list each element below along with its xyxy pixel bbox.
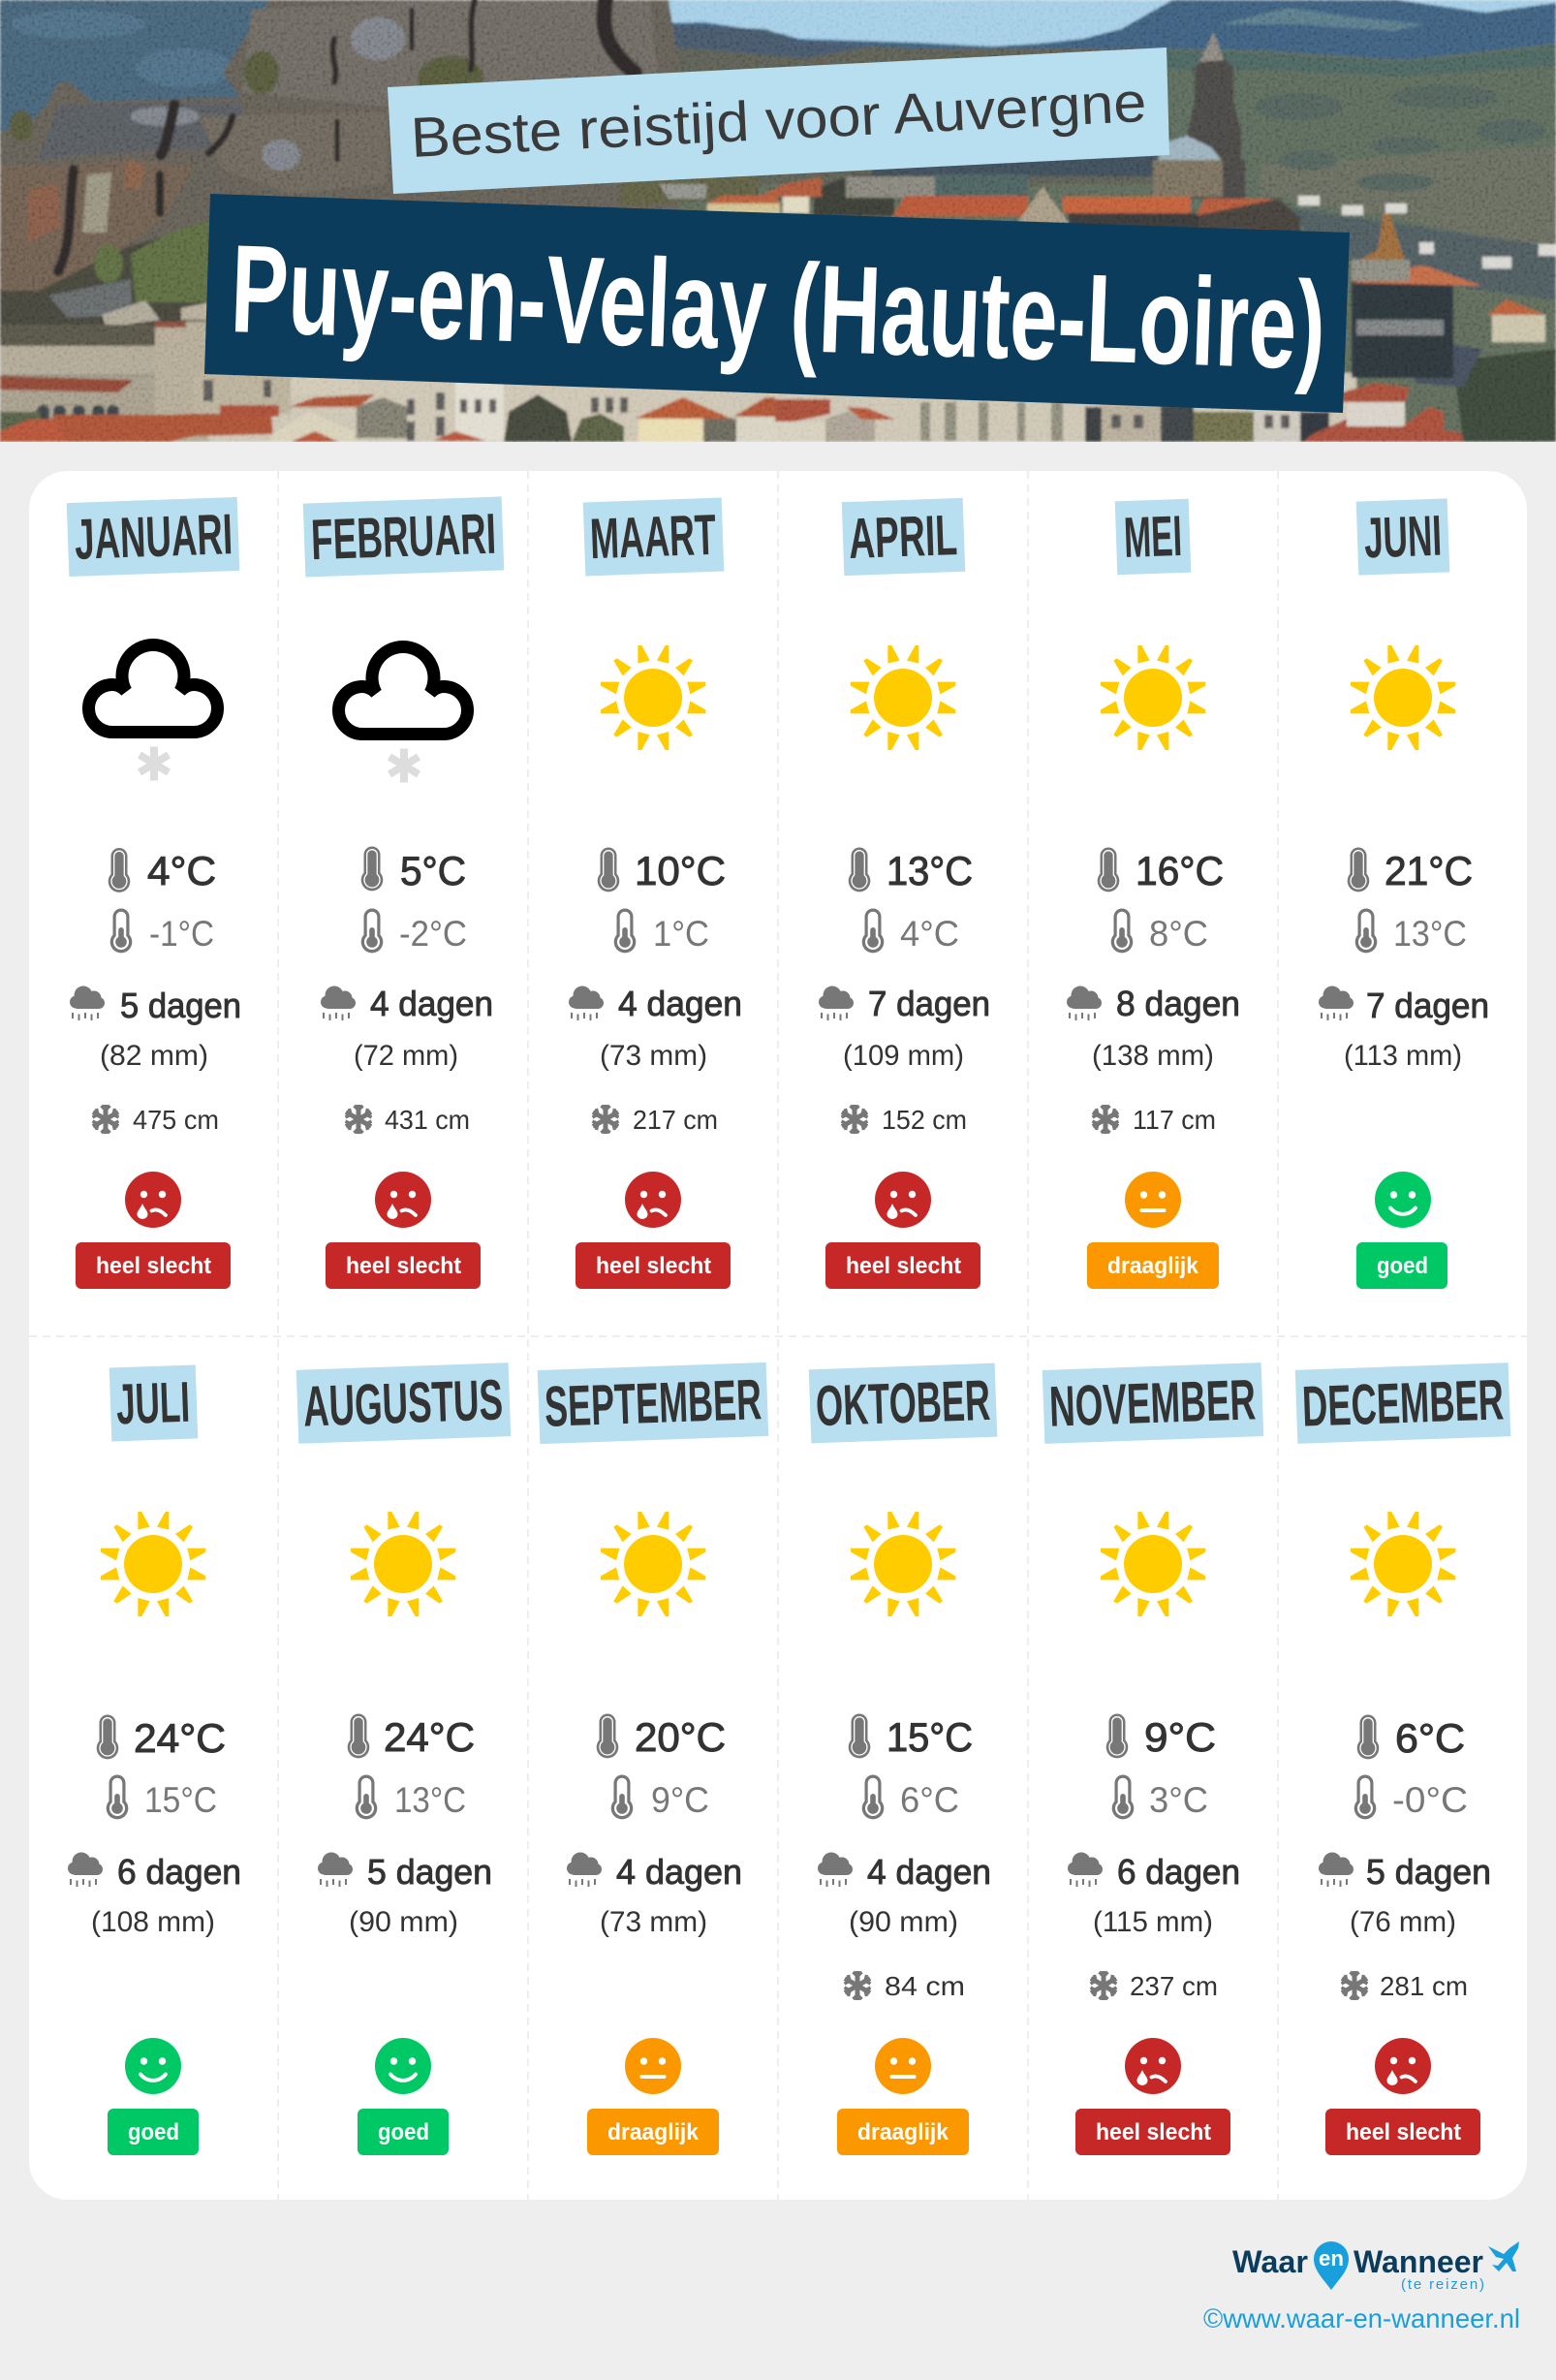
month label [538,1362,768,1444]
rating face [625,2038,681,2094]
rainfall: (90 mm) [849,1906,958,1938]
weather icon: sun [1351,1512,1455,1616]
rating badge [1087,1242,1219,1289]
snowfall: 152 cm [882,1105,967,1135]
rating badge [837,2109,969,2155]
month label: FEBRUARI [310,502,497,572]
rating badge [108,2109,199,2155]
month: december [1295,1362,1510,2155]
low temperature [614,909,709,954]
high temperature [361,847,466,893]
month label: APRIL [848,503,958,571]
month: februari [303,496,504,1289]
high temperature [597,1713,726,1760]
month label: SEPTEMBER [544,1367,762,1439]
rain days: 4 dagen [867,1852,991,1892]
rain days: 8 dagen [1116,984,1240,1023]
month: juli [68,1364,241,2155]
rating face [375,1172,431,1228]
rating badge [1356,1242,1447,1289]
snowfall: 117 cm [1133,1105,1216,1135]
month label: OKTOBER [815,1368,991,1438]
low temperature: 4°C [900,914,959,954]
rating badge: goed [378,2119,429,2145]
rain days: 5 dagen [120,986,241,1025]
month: april [819,498,990,1289]
high temperature: 20°C [635,1714,726,1760]
high temperature: 15°C [887,1714,973,1760]
rating badge [1325,2109,1480,2155]
high temperature [109,848,216,893]
rain days: 7 dagen [1366,986,1489,1025]
low temperature [862,909,959,954]
weather icon: sun [851,1512,955,1616]
weather icon: sun [351,1512,455,1616]
snowfall: 281 cm [1380,1971,1468,2001]
rainfall: (108 mm) [91,1906,215,1938]
rating badge: heel slecht [96,1253,211,1279]
snowfall [593,1105,718,1135]
rain days [70,986,241,1025]
rainfall: (76 mm) [1350,1906,1456,1938]
logo: Waar en Wanneer [1232,2241,1519,2293]
high temperature [849,1713,973,1760]
rainfall: (115 mm) [1093,1906,1213,1938]
rating face [375,2038,431,2094]
snowfall [1093,1105,1216,1135]
rating badge: goed [1377,1253,1428,1279]
weather icon: cloud with snow [89,645,217,781]
logo: Waar en Wanneer: Wanneer [1354,2244,1483,2279]
low temperature: 13°C [394,1780,466,1820]
rain days: 5 dagen [1366,1852,1491,1892]
rating badge: heel slecht [1096,2119,1211,2145]
low temperature: 3°C [1149,1780,1208,1820]
month: maart [569,498,742,1289]
high temperature: 4°C [147,848,216,893]
low temperature: 15°C [144,1780,217,1820]
high temperature [1357,1715,1465,1761]
rating badge: heel slecht [1346,2119,1461,2145]
snowfall: 217 cm [633,1105,718,1135]
low temperature: -2°C [399,914,467,954]
low temperature [1355,909,1467,954]
low temperature: 13°C [1393,914,1467,954]
rating badge [1075,2109,1230,2155]
rain days: 6 dagen [1117,1852,1240,1892]
snowfall [1341,1971,1468,2001]
month: mei [1067,499,1240,1289]
high temperature: 24°C [134,1715,226,1761]
rainfall: (109 mm) [843,1040,964,1072]
month label: JULI [115,1370,191,1436]
month label [296,1362,511,1444]
month label [583,498,724,576]
high temperature: 13°C [887,848,973,893]
low temperature [361,909,467,954]
month label: JUNI [1363,504,1443,570]
rating badge: heel slecht [596,1253,711,1279]
month: juni [1319,498,1489,1289]
month: januari [67,497,241,1289]
weather icon: sun [601,1512,705,1616]
rating badge: heel slecht [346,1253,461,1279]
rainfall: (138 mm) [1092,1040,1214,1072]
weather icon: sun [851,645,955,750]
rainfall: (73 mm) [600,1040,707,1072]
header photo: Le Puy-en-Velay [0,0,1556,442]
rating face [875,2038,931,2094]
rating face [125,2038,181,2094]
low temperature [356,1775,466,1820]
weather icon: sun [1101,645,1205,750]
snowfall: 84 cm [885,1971,965,2001]
month label: MEI [1123,504,1183,570]
snowfall: 431 cm [385,1105,470,1135]
rainfall: (90 mm) [349,1906,458,1938]
low temperature [1112,1775,1208,1820]
icon: airplane [1488,2241,1519,2271]
rating face [1125,1172,1181,1228]
month label: MAART [589,503,717,571]
rating badge [825,1242,980,1289]
calendar card [29,471,1527,2200]
rating face [125,1172,181,1228]
rating face [625,1172,681,1228]
month: augustus [296,1362,511,2155]
low temperature: 9°C [651,1780,709,1820]
high temperature: 9°C [1144,1714,1216,1760]
rain days: 4 dagen [616,1852,742,1892]
high temperature [1106,1713,1216,1760]
high temperature: 6°C [1395,1715,1465,1761]
rating badge: draaglijk [1107,1253,1199,1279]
rating badge [587,2109,719,2155]
month label: JANUARI [74,502,233,572]
month: november [1043,1362,1263,2155]
rain days: 6 dagen [117,1852,241,1892]
rainfall: (72 mm) [354,1040,458,1072]
weather icon: sun [1101,1512,1205,1616]
month label [842,498,965,576]
rating badge: heel slecht [846,1253,961,1279]
icon: map pin: en [1319,2246,1344,2270]
website url: ©www.waar-en-wanneer.nl [1203,2303,1520,2333]
month label [809,1363,997,1443]
low temperature [110,909,214,954]
month label [303,496,504,578]
rating badge: draaglijk [607,2119,700,2145]
weather icon: sun [601,645,705,750]
rating face [1375,2038,1431,2094]
month label [67,497,239,577]
high temperature: 10°C [635,848,726,893]
weather icon: cloud with snow [339,647,467,783]
logo: Waar en Wanneer: (te reizen) [1401,2276,1484,2293]
rating face [875,1172,931,1228]
rainfall: (82 mm) [100,1040,208,1072]
month label [109,1364,198,1442]
high temperature: 24°C [384,1714,475,1760]
snowfall: 475 cm [133,1105,219,1135]
weather icon: sun [101,1512,205,1616]
low temperature [1354,1775,1468,1820]
month: september [538,1362,768,2155]
low temperature [107,1775,217,1820]
icon: map pin [1314,2241,1349,2290]
high temperature: 16°C [1136,848,1224,893]
high temperature [97,1715,226,1761]
subtitle banner [388,47,1169,194]
weather icon: sun [1351,645,1455,750]
rainfall: (73 mm) [600,1906,707,1938]
rating face [1375,1172,1431,1228]
high temperature: 5°C [400,848,466,893]
high temperature: 21°C [1385,848,1473,893]
low temperature: 1°C [653,914,709,954]
snowfall [1091,1971,1218,2001]
month label: NOVEMBER [1048,1367,1257,1439]
month label [1043,1362,1263,1444]
rain days: 4 dagen [618,984,742,1023]
rating badge [326,1242,481,1289]
rating badge [358,2109,449,2155]
logo: Waar en Wanneer: Waar [1232,2244,1308,2279]
rating badge: goed [128,2119,179,2145]
month label [1356,498,1449,576]
rain days: 4 dagen [370,984,493,1023]
high temperature [1098,847,1224,893]
low temperature [1111,909,1208,954]
snowfall: 237 cm [1130,1971,1218,2001]
rating badge [576,1242,731,1289]
low temperature: -0°C [1392,1780,1468,1820]
low temperature: 8°C [1149,914,1208,954]
rain days [819,984,990,1023]
low temperature: 6°C [900,1780,959,1820]
rating badge: draaglijk [857,2119,949,2145]
low temperature [611,1775,709,1820]
snowfall [345,1105,470,1135]
rating badge [76,1242,231,1289]
high temperature [849,847,973,893]
snowfall [841,1105,967,1135]
snowfall [93,1105,219,1135]
rainfall: (113 mm) [1344,1040,1462,1072]
month label [1115,499,1191,575]
snowfall [845,1971,965,2001]
month: oktober [809,1363,997,2155]
rain days: 7 dagen [868,984,990,1023]
high temperature [1348,847,1473,893]
low temperature [862,1775,959,1820]
low temperature: -1°C [149,914,214,954]
rain days: 5 dagen [367,1852,492,1892]
month label: AUGUSTUS [302,1367,504,1439]
subtitle banner: Beste reistijd voor Auvergne [409,71,1148,170]
rating face [1125,2038,1181,2094]
